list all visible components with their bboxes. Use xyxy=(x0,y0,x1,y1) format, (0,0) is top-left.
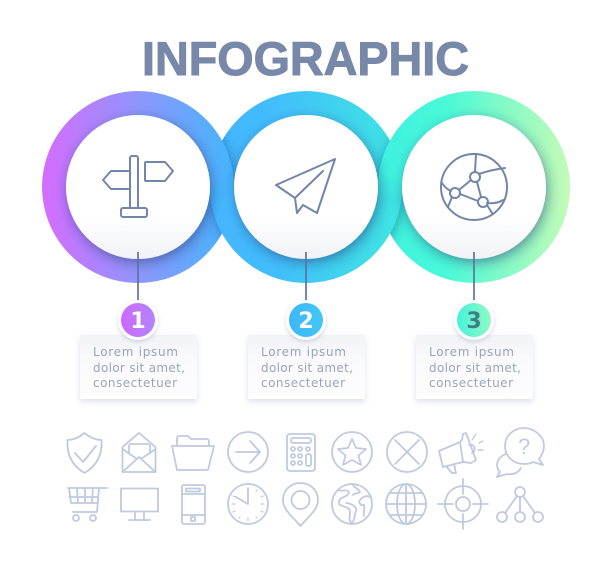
icon: shopping cart xyxy=(68,488,107,521)
icon: calculator xyxy=(287,434,315,471)
panel: text box 1: dolor sit amet, xyxy=(93,361,185,375)
title: INFOGRAPHIC xyxy=(142,32,469,85)
icon: earth xyxy=(332,484,372,524)
icon: target xyxy=(438,479,488,529)
icon: shield check xyxy=(67,433,102,473)
icon: paper plane xyxy=(276,159,335,213)
icon: arrow circle xyxy=(228,432,268,472)
icon: clock xyxy=(228,484,268,524)
icon: wire globe xyxy=(386,484,426,524)
panel: text box 3 xyxy=(416,335,533,399)
number badge 2: 2 xyxy=(298,309,314,334)
panel: text box 2: Lorem ipsum xyxy=(261,345,346,359)
icon: star circle xyxy=(332,432,372,472)
number badge 3: 3 xyxy=(466,309,482,334)
icon: monitor xyxy=(121,488,158,520)
panel: text box 2: dolor sit amet, xyxy=(261,361,353,375)
icon: signpost xyxy=(103,156,173,217)
number badge 2 xyxy=(286,300,326,340)
connector 1 xyxy=(137,252,139,306)
panel: text box 2: consectetuer xyxy=(261,376,345,390)
icon: speech bubbles: ? xyxy=(518,434,530,459)
icon: open envelope xyxy=(122,433,156,472)
icon: network globe xyxy=(441,154,507,220)
panel: text box 1: Lorem ipsum xyxy=(93,345,178,359)
panel: text box 1 xyxy=(80,335,197,399)
icon: speech bubbles xyxy=(497,428,544,477)
connector 2 xyxy=(305,252,307,306)
number badge 3 xyxy=(454,300,494,340)
panel: text box 2 xyxy=(248,335,365,399)
icon: megaphone xyxy=(439,433,483,473)
panel: text box 3: Lorem ipsum xyxy=(429,345,514,359)
icon: map pin xyxy=(283,483,318,526)
icon: folder xyxy=(172,436,214,470)
connector 3 xyxy=(473,252,475,306)
interlocking gradient rings xyxy=(54,103,558,271)
icon: cross circle xyxy=(387,432,427,472)
icon: smartphone xyxy=(182,485,205,524)
panel: text box 3: dolor sit amet, xyxy=(429,361,521,375)
number badge 1: 1 xyxy=(130,309,146,334)
icon: hierarchy xyxy=(497,487,543,522)
panel: text box 1: consectetuer xyxy=(93,376,177,390)
number badge 1 xyxy=(118,300,158,340)
panel: text box 3: consectetuer xyxy=(429,376,513,390)
